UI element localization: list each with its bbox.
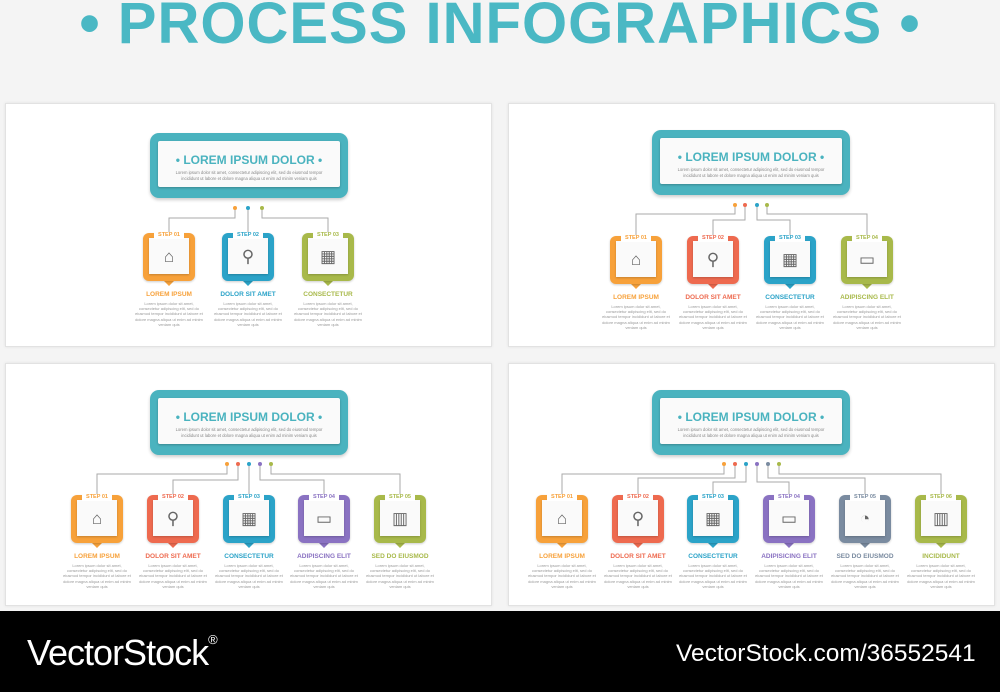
card: p4 step 02: ⚲ bbox=[632, 509, 644, 528]
card: p4 step 06: INCIDIDUNT bbox=[922, 553, 960, 560]
card: p2 step 04 bbox=[833, 235, 901, 330]
card: p4 step 06: STEP 06 bbox=[930, 494, 952, 500]
card: p3 step 05 bbox=[366, 494, 434, 589]
card: p4 step 06: ▥ bbox=[933, 509, 949, 528]
header box: panel 1 bbox=[150, 133, 348, 198]
card: p4 step 02: STEP 02 bbox=[627, 494, 649, 500]
card: p4 step 01: STEP 01 bbox=[551, 494, 573, 500]
card: p3 step 03: CONSECTETUR bbox=[224, 553, 274, 560]
header box: panel 1: Lorem ipsum dolor sit amet, consectetur adipiscing elit, sed do eiusmod tempor incididunt ut labore et dolore magna aliqua ut enim ad minim veniam quis bbox=[176, 170, 322, 181]
card: p3 step 05: ▥ bbox=[392, 509, 408, 528]
card: p4 step 01: Lorem ipsum dolor sit amet, consectetur adipiscing elit, sed do eiusmod tempor incididunt ut labore et dolore magna aliqua ut enim ad minim veniam quis bbox=[528, 563, 596, 589]
card: p1 step 02: Lorem ipsum dolor sit amet, consectetur adipiscing elit, sed do eiusmod tempor incididunt ut labore et dolore magna aliqua ut enim ad minim veniam quis bbox=[214, 301, 282, 327]
header box: panel 2: • LOREM IPSUM DOLOR • bbox=[678, 150, 824, 164]
card: p3 step 02: DOLOR SIT AMET bbox=[145, 553, 201, 560]
card: p3 step 03: ▦ bbox=[241, 509, 257, 528]
card: p3 step 01: Lorem ipsum dolor sit amet, consectetur adipiscing elit, sed do eiusmod tempor incididunt ut labore et dolore magna aliqua ut enim ad minim veniam quis bbox=[63, 563, 131, 589]
card: p4 step 04: Lorem ipsum dolor sit amet, consectetur adipiscing elit, sed do eiusmod tempor incididunt ut labore et dolore magna aliqua ut enim ad minim veniam quis bbox=[755, 563, 823, 589]
card: p1 step 03 bbox=[294, 232, 362, 327]
header box: panel 2: Lorem ipsum dolor sit amet, consectetur adipiscing elit, sed do eiusmod tempor incididunt ut labore et dolore magna aliqua ut enim ad minim veniam quis bbox=[678, 167, 824, 178]
card: p2 step 02 bbox=[679, 235, 747, 330]
card: p3 step 01 bbox=[63, 494, 131, 589]
card: p4 step 06: Lorem ipsum dolor sit amet, consectetur adipiscing elit, sed do eiusmod tempor incididunt ut labore et dolore magna aliqua ut enim ad minim veniam quis bbox=[907, 563, 975, 589]
header box: panel 3 bbox=[150, 390, 348, 455]
card: p1 step 01: ⌂ bbox=[164, 247, 174, 266]
card: p4 step 04 bbox=[755, 494, 823, 589]
panel: three steps bbox=[5, 103, 492, 347]
card: p2 step 02: ⚲ bbox=[707, 250, 719, 269]
footer logo: VectorStock® bbox=[27, 632, 217, 673]
header box: panel 3: Lorem ipsum dolor sit amet, consectetur adipiscing elit, sed do eiusmod tempor incididunt ut labore et dolore magna aliqua ut enim ad minim veniam quis bbox=[176, 427, 322, 438]
card: p1 step 03: CONSECTETUR bbox=[303, 291, 353, 298]
header box: panel 4 bbox=[652, 390, 850, 455]
card: p1 step 01: LOREM IPSUM bbox=[146, 291, 192, 298]
card: p2 step 01: LOREM IPSUM bbox=[613, 294, 659, 301]
header box: panel 1: • LOREM IPSUM DOLOR • bbox=[176, 153, 322, 167]
card: p3 step 03 bbox=[215, 494, 283, 589]
card: p2 step 04: Lorem ipsum dolor sit amet, consectetur adipiscing elit, sed do eiusmod tempor incididunt ut labore et dolore magna aliqua ut enim ad minim veniam quis bbox=[833, 304, 901, 330]
card: p4 step 03: ▦ bbox=[705, 509, 721, 528]
card: p3 step 03: STEP 03 bbox=[238, 494, 260, 500]
footer bar bbox=[0, 611, 1000, 692]
card: p1 step 02: DOLOR SIT AMET bbox=[220, 291, 276, 298]
card: p4 step 06 bbox=[907, 494, 975, 589]
card: p3 step 02 bbox=[139, 494, 207, 589]
card: p4 step 02: Lorem ipsum dolor sit amet, consectetur adipiscing elit, sed do eiusmod tempor incididunt ut labore et dolore magna aliqua ut enim ad minim veniam quis bbox=[604, 563, 672, 589]
card: p2 step 03: Lorem ipsum dolor sit amet, consectetur adipiscing elit, sed do eiusmod tempor incididunt ut labore et dolore magna aliqua ut enim ad minim veniam quis bbox=[756, 304, 824, 330]
card: p2 step 02: DOLOR SIT AMET bbox=[685, 294, 741, 301]
card: p4 step 01: ⌂ bbox=[557, 509, 567, 528]
panel: five steps bbox=[5, 363, 492, 606]
card: p1 step 01: Lorem ipsum dolor sit amet, consectetur adipiscing elit, sed do eiusmod tempor incididunt ut labore et dolore magna aliqua ut enim ad minim veniam quis bbox=[135, 301, 203, 327]
card: p3 step 03: Lorem ipsum dolor sit amet, consectetur adipiscing elit, sed do eiusmod tempor incididunt ut labore et dolore magna aliqua ut enim ad minim veniam quis bbox=[215, 563, 283, 589]
card: p3 step 05: SED DO EIUSMOD bbox=[371, 553, 429, 560]
card: p3 step 05: Lorem ipsum dolor sit amet, consectetur adipiscing elit, sed do eiusmod tempor incididunt ut labore et dolore magna aliqua ut enim ad minim veniam quis bbox=[366, 563, 434, 589]
panel: four steps bbox=[508, 103, 995, 347]
card: p2 step 02: STEP 02 bbox=[702, 235, 724, 241]
card: p3 step 04: ADIPISCING ELIT bbox=[297, 553, 351, 560]
card: p1 step 02: STEP 02 bbox=[237, 232, 259, 238]
header box: panel 4: • LOREM IPSUM DOLOR • bbox=[678, 410, 824, 424]
card: p1 step 01 bbox=[135, 232, 203, 327]
card: p3 step 04: STEP 04 bbox=[313, 494, 335, 500]
header box: panel 2 bbox=[652, 130, 850, 195]
card: p4 step 03: STEP 03 bbox=[702, 494, 724, 500]
card: p3 step 01: LOREM IPSUM bbox=[74, 553, 120, 560]
card: p4 step 05 bbox=[831, 494, 899, 589]
card: p4 step 04: ▭ bbox=[781, 509, 797, 528]
card: p2 step 04: STEP 04 bbox=[856, 235, 878, 241]
card: p2 step 01: ⌂ bbox=[631, 250, 641, 269]
card: p1 step 02: ⚲ bbox=[242, 247, 254, 266]
card: p3 step 05: STEP 05 bbox=[389, 494, 411, 500]
card: p3 step 04 bbox=[290, 494, 358, 589]
card: p4 step 02 bbox=[604, 494, 672, 589]
card: p4 step 03: Lorem ipsum dolor sit amet, consectetur adipiscing elit, sed do eiusmod tempor incididunt ut labore et dolore magna aliqua ut enim ad minim veniam quis bbox=[679, 563, 747, 589]
card: p3 step 01: STEP 01 bbox=[86, 494, 108, 500]
card: p2 step 01 bbox=[602, 235, 670, 330]
card: p4 step 03 bbox=[679, 494, 747, 589]
card: p1 step 03: ▦ bbox=[320, 247, 336, 266]
card: p4 step 05: Lorem ipsum dolor sit amet, consectetur adipiscing elit, sed do eiusmod tempor incididunt ut labore et dolore magna aliqua ut enim ad minim veniam quis bbox=[831, 563, 899, 589]
header box: panel 4: Lorem ipsum dolor sit amet, consectetur adipiscing elit, sed do eiusmod tempor incididunt ut labore et dolore magna aliqua ut enim ad minim veniam quis bbox=[678, 427, 824, 438]
card: p3 step 02: ⚲ bbox=[167, 509, 179, 528]
card: p3 step 02: Lorem ipsum dolor sit amet, consectetur adipiscing elit, sed do eiusmod tempor incididunt ut labore et dolore magna aliqua ut enim ad minim veniam quis bbox=[139, 563, 207, 589]
panel: six steps bbox=[508, 363, 995, 606]
card: p2 step 04: ADIPISCING ELIT bbox=[840, 294, 894, 301]
card: p1 step 02 bbox=[214, 232, 282, 327]
card: p4 step 04: ADIPISICING ELIT bbox=[761, 553, 817, 560]
card: p3 step 01: ⌂ bbox=[92, 509, 102, 528]
header box: panel 3: • LOREM IPSUM DOLOR • bbox=[176, 410, 322, 424]
card: p3 step 04: ▭ bbox=[316, 509, 332, 528]
card: p2 step 04: ▭ bbox=[859, 250, 875, 269]
card: p1 step 03: Lorem ipsum dolor sit amet, consectetur adipiscing elit, sed do eiusmod tempor incididunt ut labore et dolore magna aliqua ut enim ad minim veniam quis bbox=[294, 301, 362, 327]
card: p2 step 02: Lorem ipsum dolor sit amet, consectetur adipiscing elit, sed do eiusmod tempor incididunt ut labore et dolore magna aliqua ut enim ad minim veniam quis bbox=[679, 304, 747, 330]
card: p1 step 03: STEP 03 bbox=[317, 232, 339, 238]
card: p2 step 03: CONSECTETUR bbox=[765, 294, 815, 301]
card: p4 step 05: SED DO EIUSMOD bbox=[836, 553, 894, 560]
card: p2 step 03: ▦ bbox=[782, 250, 798, 269]
card: p4 step 02: DOLOR SIT AMET bbox=[610, 553, 666, 560]
card: p4 step 03: CONSECTETUR bbox=[688, 553, 738, 560]
card: p2 step 03 bbox=[756, 235, 824, 330]
card: p4 step 05: STEP 05 bbox=[854, 494, 876, 500]
footer url: VectorStock.com/36552541 bbox=[676, 640, 976, 667]
card: p4 step 05: ◔ bbox=[860, 509, 870, 528]
card: p2 step 01: Lorem ipsum dolor sit amet, consectetur adipiscing elit, sed do eiusmod tempor incididunt ut labore et dolore magna aliqua ut enim ad minim veniam quis bbox=[602, 304, 670, 330]
card: p3 step 02: STEP 02 bbox=[162, 494, 184, 500]
card: p4 step 01 bbox=[528, 494, 596, 589]
card: p1 step 01: STEP 01 bbox=[158, 232, 180, 238]
card: p4 step 01: LOREM IPSUM bbox=[539, 553, 585, 560]
card: p2 step 03: STEP 03 bbox=[779, 235, 801, 241]
card: p4 step 04: STEP 04 bbox=[778, 494, 800, 500]
card: p2 step 01: STEP 01 bbox=[625, 235, 647, 241]
card: p3 step 04: Lorem ipsum dolor sit amet, consectetur adipiscing elit, sed do eiusmod tempor incididunt ut labore et dolore magna aliqua ut enim ad minim veniam quis bbox=[290, 563, 358, 589]
